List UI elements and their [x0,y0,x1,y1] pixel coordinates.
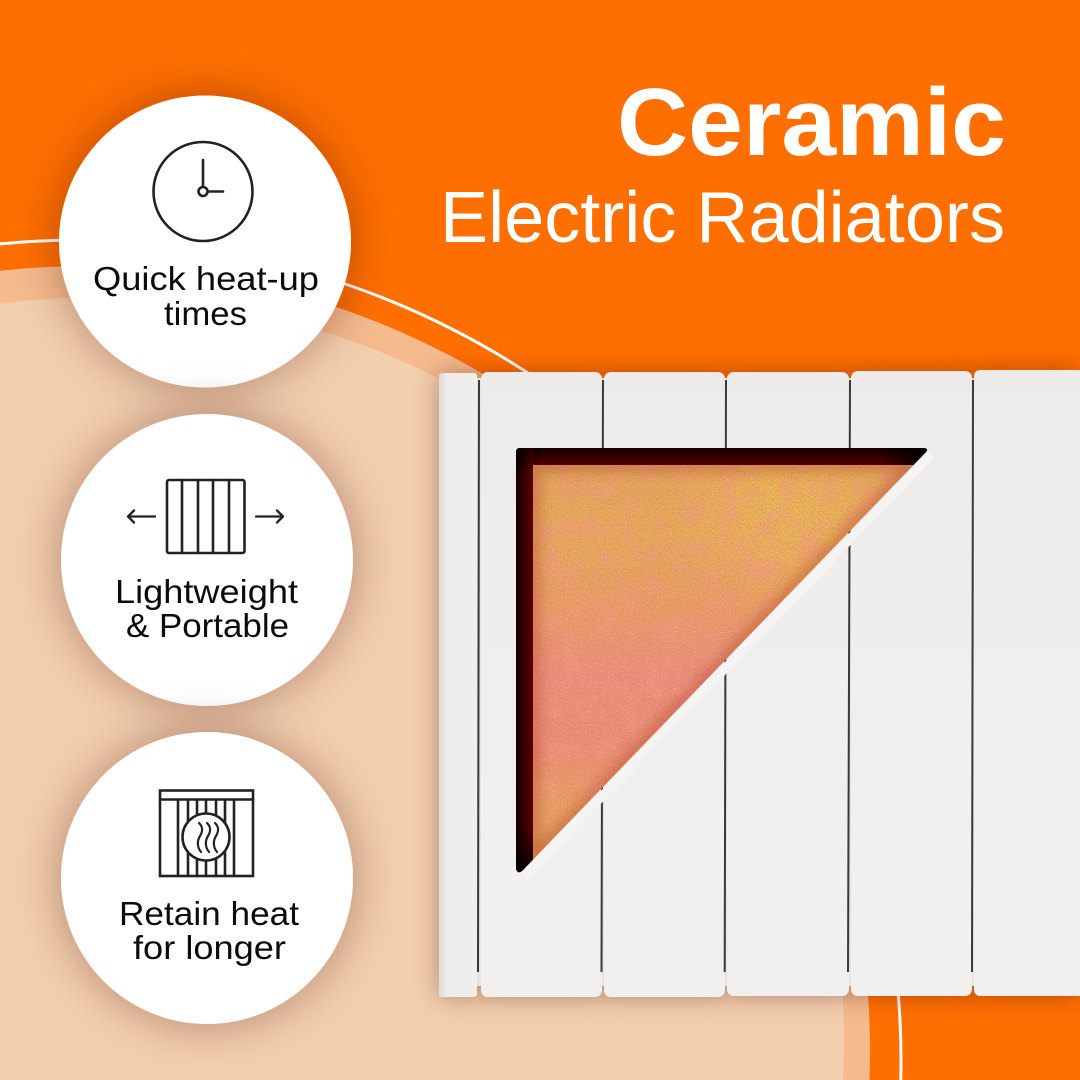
white highlight along the cut edge [524,455,931,877]
dark inner frame [510,440,940,885]
icon: radiator with arrows [128,480,283,553]
icon: clock [154,142,252,241]
radiator body panels [439,370,1080,997]
gaps between panels [478,380,973,972]
title line: Ceramic: Ceramic [617,69,1006,176]
feature badge: quick heat-up [59,96,351,388]
label: Quick heat-up [93,260,319,297]
label: & Portable [126,607,289,644]
radiator product image [439,370,1080,997]
label: Lightweight [115,573,298,610]
background: peach outer ring [0,266,870,1080]
icon: radiator core with heat waves [160,790,253,876]
feature badge: lightweight and portable [61,414,353,706]
title [440,69,1006,258]
label: Retain heat [119,895,299,932]
badge circle [59,96,351,388]
background: peach inner circle [0,297,844,1080]
feature badge: retain heat [61,732,353,1024]
background: white arc line [0,240,901,1080]
ceramic heated core [530,460,920,862]
cut-out showing ceramic core [510,440,940,885]
badge circle [61,732,353,1024]
label: for longer [133,929,286,966]
label: times [164,295,247,332]
badge circle [61,414,353,706]
subtitle: Electric Radiators: Electric Radiators [440,178,1005,258]
